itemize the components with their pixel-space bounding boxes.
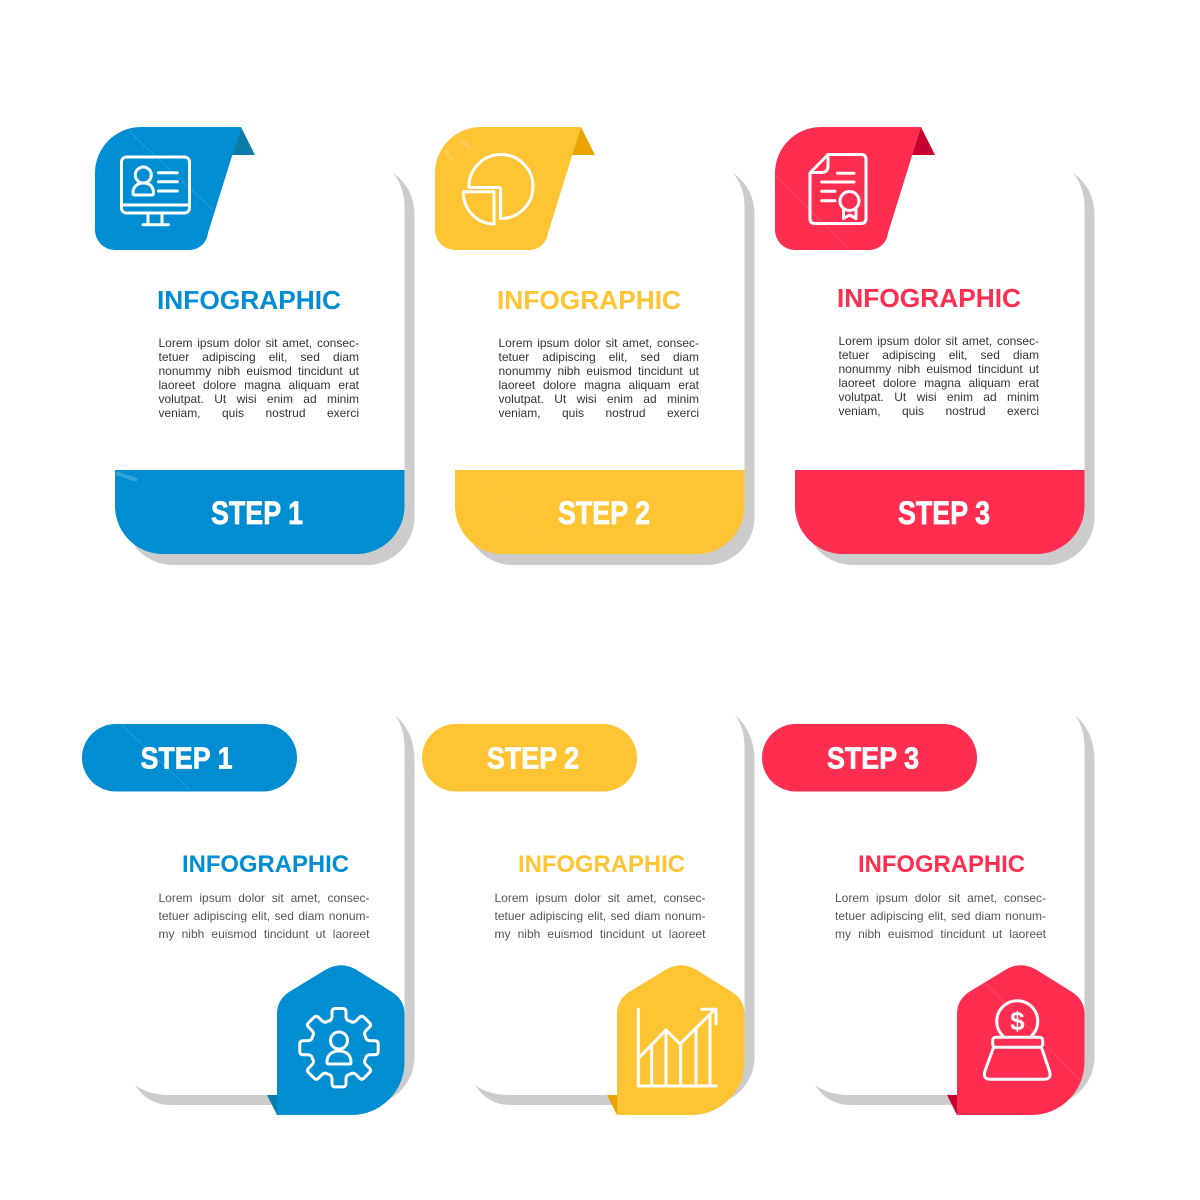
body text (835, 891, 1046, 941)
body text: Lorem ipsum dolor sit amet, consec- (158, 891, 370, 905)
step band: STEP 2 (558, 495, 650, 531)
body text: nonummy nibh euismod tincidunt ut (838, 362, 1039, 376)
body text: veniam, quis nostrud exerci (498, 406, 699, 420)
ribbon flag (95, 127, 255, 250)
panel: top card step 3 (775, 127, 1094, 565)
panel: bottom card step 3 (762, 715, 1094, 1115)
step band: STEP 1 (211, 495, 303, 531)
body text: volutpat. Ut wisi enim ad minim (158, 392, 359, 406)
body text: volutpat. Ut wisi enim ad minim (838, 390, 1039, 404)
panel: top card step 1 (95, 127, 414, 565)
ribbon flag (775, 127, 935, 250)
icon: rising bar chart (638, 1009, 716, 1086)
panel: top card step 2 (435, 127, 754, 565)
body text: laoreet dolore magna aliquam erat (838, 376, 1039, 390)
body text: tetuer adipiscing elit, sed diam (838, 348, 1039, 362)
body text: laoreet dolore magna aliquam erat (158, 378, 359, 392)
hexagon badge (947, 965, 1084, 1115)
body text (498, 336, 699, 420)
heading: INFOGRAPHIC (858, 851, 1025, 878)
body text: nonummy nibh euismod tincidunt ut (158, 364, 359, 378)
body text: Lorem ipsum dolor sit amet, consec- (835, 891, 1046, 905)
ribbon flag (435, 127, 595, 250)
body text (158, 891, 370, 941)
step pill: STEP 3 (827, 740, 919, 776)
panel: bottom card step 2 (422, 715, 754, 1115)
panel: bottom card step 1 (82, 715, 414, 1115)
body text: laoreet dolore magna aliquam erat (498, 378, 699, 392)
body text: tetuer adipiscing elit, sed diam nonum- (158, 909, 370, 923)
body text: Lorem ipsum dolor sit amet, consec- (498, 336, 699, 350)
icon: monitor with profile (122, 157, 190, 225)
body text: tetuer adipiscing elit, sed diam (158, 350, 359, 364)
body text: volutpat. Ut wisi enim ad minim (498, 392, 699, 406)
step band (115, 470, 404, 554)
body text: veniam, quis nostrud exerci (838, 404, 1039, 418)
body text: Lorem ipsum dolor sit amet, consec- (494, 891, 706, 905)
body text: my nibh euismod tincidunt ut laoreet (494, 927, 706, 941)
body text: tetuer adipiscing elit, sed diam nonum- (494, 909, 706, 923)
icon: gear with person (300, 1008, 378, 1087)
heading: INFOGRAPHIC (157, 285, 341, 315)
body text (838, 334, 1039, 418)
body text (158, 336, 359, 420)
body text: tetuer adipiscing elit, sed diam (498, 350, 699, 364)
step pill: STEP 1 (140, 740, 232, 776)
body text: my nibh euismod tincidunt ut laoreet (158, 927, 370, 941)
step pill: STEP 2 (487, 740, 579, 776)
step pill (82, 724, 297, 792)
step pill (422, 724, 637, 792)
body text: veniam, quis nostrud exerci (158, 406, 359, 420)
heading: INFOGRAPHIC (837, 283, 1021, 313)
icon: certificate document (810, 154, 866, 224)
hexagon badge (607, 965, 744, 1115)
heading: INFOGRAPHIC (497, 285, 681, 315)
icon: money bag with coin (984, 1001, 1050, 1079)
heading: INFOGRAPHIC (182, 851, 349, 878)
step band (795, 470, 1084, 554)
body text (494, 891, 706, 941)
step band: STEP 3 (898, 495, 990, 531)
hexagon badge (267, 965, 404, 1115)
body text: Lorem ipsum dolor sit amet, consec- (158, 336, 359, 350)
step band (455, 470, 744, 554)
icon: pie chart (463, 155, 533, 224)
body text: my nibh euismod tincidunt ut laoreet (835, 927, 1046, 941)
body text: nonummy nibh euismod tincidunt ut (498, 364, 699, 378)
icon: money bag with coin: $ (1010, 1006, 1025, 1036)
body text: tetuer adipiscing elit, sed diam nonum- (835, 909, 1046, 923)
step pill (762, 724, 977, 792)
heading: INFOGRAPHIC (518, 851, 685, 878)
body text: Lorem ipsum dolor sit amet, consec- (838, 334, 1039, 348)
